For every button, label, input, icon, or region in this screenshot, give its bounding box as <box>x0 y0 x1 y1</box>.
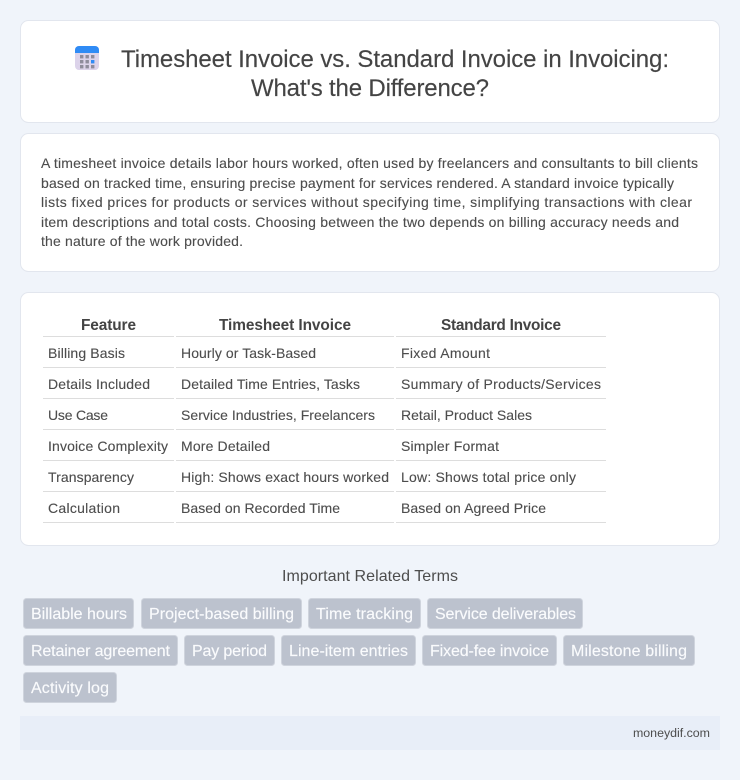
text block: description paragraph: the nature of the work provided. <box>41 233 243 249</box>
table row: invoice complexity <box>43 438 606 461</box>
table row: use case <box>43 407 606 430</box>
tag: time tracking: Time tracking <box>316 606 413 623</box>
tag: milestone billing <box>564 636 694 666</box>
table row: calculation: Based on Agreed Price <box>401 500 546 516</box>
table header row: Standard Invoice <box>441 317 561 334</box>
text block: description paragraph: lists fixed prices for products or services without specifying time, simplifying transactions with clear <box>41 194 692 210</box>
table row: billing basis: Billing Basis <box>48 345 125 361</box>
table row: details included: Summary of Products/Services <box>401 376 601 392</box>
table row: calculation: Calculation <box>48 500 120 516</box>
table row: use case: Service Industries, Freelancers <box>181 407 375 423</box>
tag: fixed-fee invoice <box>422 636 556 666</box>
icon: calendar <box>75 46 99 70</box>
tag: service deliverables <box>428 598 582 628</box>
tag: billable hours <box>24 598 134 628</box>
title: Timesheet Invoice vs. Standard Invoice in Invoicing: <box>121 46 669 73</box>
table row: billing basis <box>43 345 606 368</box>
table row: transparency: Transparency <box>48 469 134 485</box>
table row: calculation <box>43 500 606 523</box>
table row: invoice complexity: Invoice Complexity <box>48 438 168 454</box>
text block: description paragraph: based on tracked time, ensuring precise payment for services rendered. A standard invoice typically <box>41 175 674 191</box>
tag: project-based billing: Project-based billing <box>149 606 294 623</box>
table row: details included <box>43 376 606 399</box>
table row: invoice complexity: Simpler Format <box>401 438 499 454</box>
text block: description paragraph: item descriptions and total costs. Choosing between the two depends on billing accuracy needs and <box>41 214 679 230</box>
panel: description <box>20 134 720 272</box>
table row: calculation: Based on Recorded Time <box>181 500 340 516</box>
table row: transparency <box>43 469 606 492</box>
tag: retainer agreement <box>24 636 178 666</box>
table header row: Feature <box>81 317 136 334</box>
panel: comparison table <box>20 292 720 546</box>
tag list: related terms <box>24 598 694 702</box>
table row: billing basis: Fixed Amount <box>401 345 490 361</box>
panel: title header <box>20 20 720 122</box>
table row: transparency: High: Shows exact hours worked <box>181 469 389 485</box>
tag: fixed-fee invoice: Fixed-fee invoice <box>430 643 549 660</box>
tag: pay period: Pay period <box>192 643 267 660</box>
tag: activity log: Activity log <box>31 680 109 697</box>
tag: line-item entries: Line-item entries <box>289 643 408 660</box>
table row: details included: Detailed Time Entries, Tasks <box>181 376 360 392</box>
table row: details included: Details Included <box>48 376 150 392</box>
tag: project-based billing <box>142 598 302 628</box>
tag: service deliverables: Service deliverables <box>435 606 576 623</box>
table row: use case: Use Case <box>48 407 108 423</box>
table header row <box>43 317 606 337</box>
title: What's the Difference? <box>251 75 489 102</box>
tag: activity log <box>24 672 116 702</box>
table row: use case: Retail, Product Sales <box>401 407 532 423</box>
table row: transparency: Low: Shows total price only <box>401 469 576 485</box>
table header row: Timesheet Invoice <box>219 317 351 334</box>
tag: line-item entries <box>282 636 416 666</box>
table row: billing basis: Hourly or Task-Based <box>181 345 316 361</box>
text block: description paragraph <box>41 155 698 249</box>
tag: pay period <box>184 636 274 666</box>
title <box>121 46 669 102</box>
tag: billable hours: Billable hours <box>31 606 127 623</box>
tag: time tracking <box>308 598 420 628</box>
table row: invoice complexity: More Detailed <box>181 438 270 454</box>
footer <box>20 716 720 750</box>
heading: important related terms: Important Related Terms <box>282 568 458 585</box>
footer: moneydif.com <box>633 726 710 740</box>
tag: retainer agreement: Retainer agreement <box>31 643 171 660</box>
tag: milestone billing: Milestone billing <box>571 643 687 660</box>
text block: description paragraph: A timesheet invoice details labor hours worked, often used by freelancers and consultants to bill clients <box>41 155 698 171</box>
